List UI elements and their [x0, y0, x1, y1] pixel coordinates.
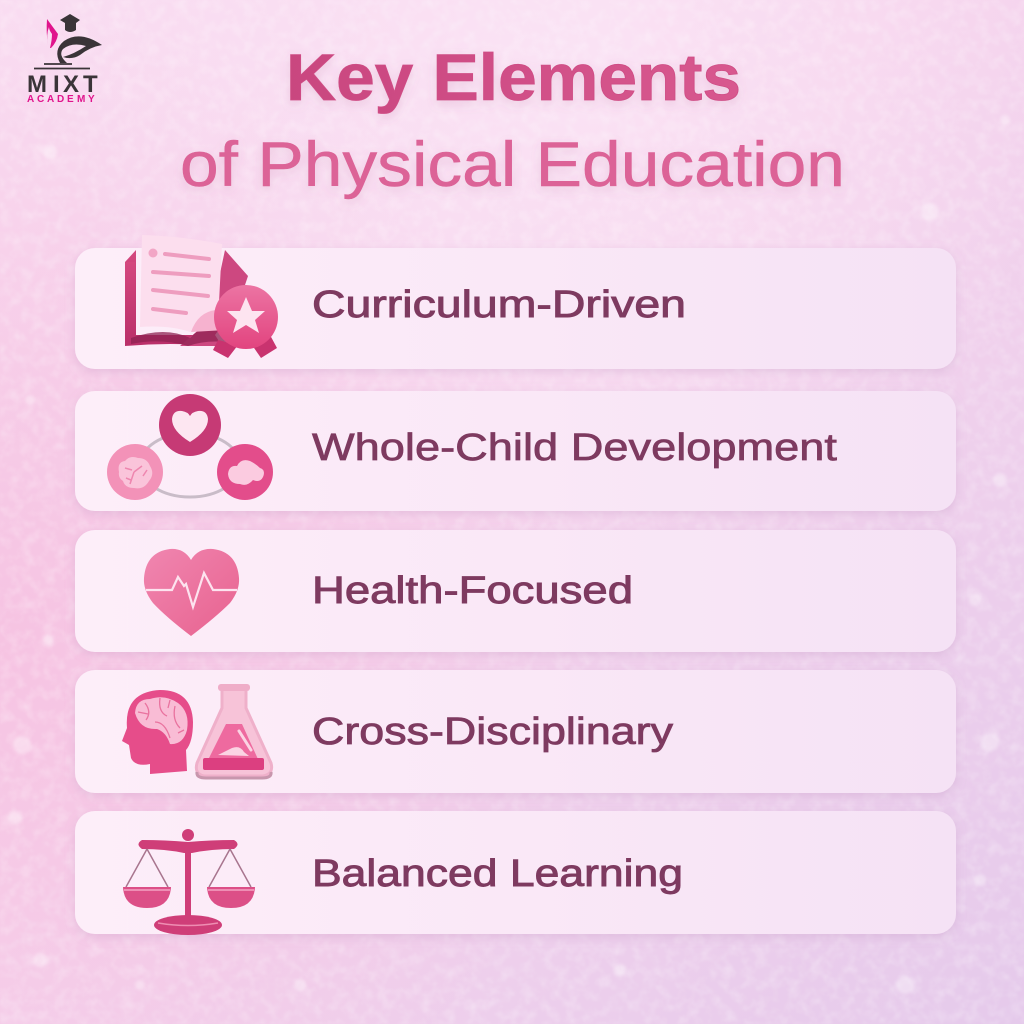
icon: heart brain lungs cycle — [107, 394, 273, 500]
label: Health-Focused — [312, 570, 633, 612]
label: Curriculum-Driven — [312, 284, 686, 326]
panel: Cross-Disciplinary — [75, 670, 956, 793]
title: Key Elements: Key Elements — [286, 40, 741, 114]
icon: flask — [196, 684, 272, 778]
label: Whole-Child Development — [312, 427, 838, 469]
logo icon: graduation cap — [60, 14, 80, 32]
panel: Whole-Child Development — [75, 391, 956, 511]
label: Cross-Disciplinary — [312, 711, 673, 753]
logo wordmark: MIXT: MIXT — [27, 71, 98, 98]
logo wordmark: ACADEMY: ACADEMY — [27, 94, 95, 105]
logo icon: base line — [34, 64, 90, 68]
panel: Balanced Learning — [75, 811, 956, 935]
panel: Curriculum-Driven — [75, 235, 956, 369]
icon: heart with pulse — [144, 549, 239, 636]
label: Balanced Learning — [312, 853, 683, 895]
icon: head with brain — [122, 690, 193, 774]
panel: Health-Focused — [75, 530, 956, 652]
icon: balance scales — [123, 829, 255, 935]
logo icon: pink leaf — [47, 19, 58, 48]
icon: open book with medal — [125, 235, 278, 358]
logo: Mixt Academy — [27, 14, 102, 105]
logo icon: dark leaf — [57, 36, 102, 63]
subtitle: of Physical Education: of Physical Education — [180, 130, 845, 200]
